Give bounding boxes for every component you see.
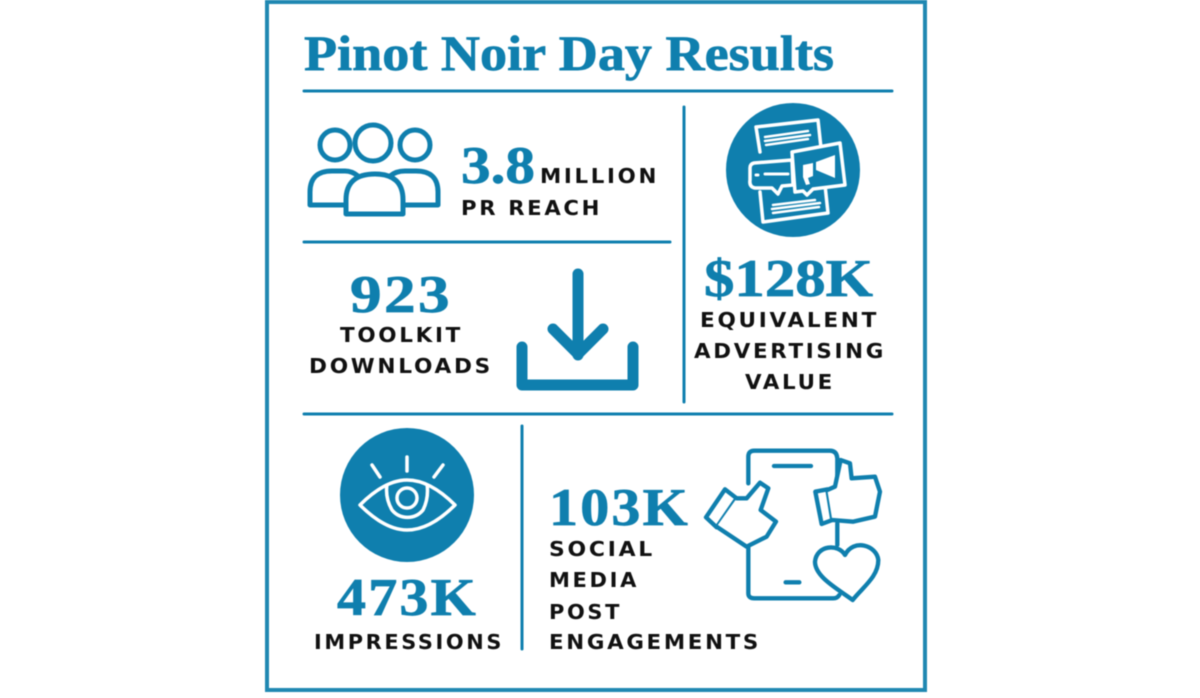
label: advertising: ADVERTISING: [694, 339, 886, 363]
title: Pinot Noir Day Results: [304, 25, 834, 81]
label: media: MEDIA: [549, 568, 639, 592]
number: 473K: 473K: [337, 569, 478, 627]
label: PR reach: PR REACH: [461, 196, 602, 220]
number: 103K: 103K: [549, 479, 690, 537]
icon: media circle: [726, 103, 860, 237]
icon: phone with likes: [706, 451, 880, 600]
panel: toolkit downloads: [309, 266, 633, 385]
label: toolkit: TOOLKIT: [340, 323, 463, 347]
icon: download: [522, 274, 633, 385]
label: social: SOCIAL: [549, 537, 655, 561]
label: downloads: DOWNLOADS: [309, 354, 493, 378]
label: impressions: IMPRESSIONS: [314, 630, 504, 654]
number: 923: 923: [350, 266, 452, 324]
label: million: MILLION: [540, 164, 659, 188]
icon: people: [310, 125, 438, 214]
number: 3.8: 3.8: [461, 137, 535, 195]
panel: PR reach: [310, 125, 659, 220]
label: post: POST: [549, 600, 622, 624]
panel: advertising value: [694, 103, 886, 394]
frame: [267, 2, 925, 690]
label: value: VALUE: [745, 370, 835, 394]
icon: eye circle: [340, 428, 474, 562]
panel: social engagements: [549, 451, 880, 654]
label: equivalent: EQUIVALENT: [700, 308, 879, 332]
number: $128K: $128K: [704, 250, 873, 308]
panel: impressions: [314, 428, 504, 654]
label: engagements: ENGAGEMENTS: [549, 630, 761, 654]
